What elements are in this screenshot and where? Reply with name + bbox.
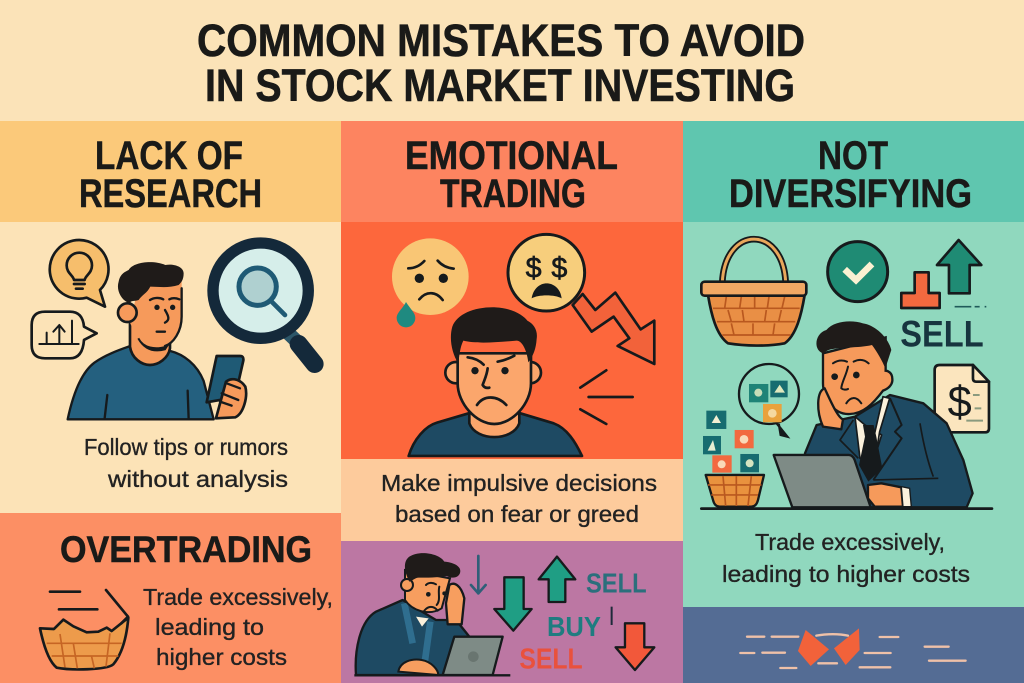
arrow: green up	[937, 240, 981, 293]
label: sell: SELL	[586, 568, 647, 599]
caption: trade excessively: leading to higher costs	[722, 561, 970, 587]
icon: check badge	[828, 242, 888, 302]
heading: emotional trading: EMOTIONAL	[405, 134, 618, 178]
panel: buy and sell confusion	[341, 541, 683, 683]
caption: trade excessively: higher costs	[156, 644, 287, 670]
arrow: green down	[494, 577, 532, 631]
icon: sad face with tear	[392, 238, 469, 327]
icon: chart bubble	[32, 312, 97, 358]
icon: large basket	[701, 239, 806, 346]
dashed streaks	[740, 634, 966, 668]
icon: dollar document	[935, 365, 989, 432]
icon: dollar-eye face: $	[551, 252, 567, 284]
heading: not diversifying: NOT	[818, 134, 888, 178]
caption: trade excessively: Trade excessively,	[755, 529, 945, 555]
label: sell red: SELL	[519, 643, 583, 675]
illustration: worried investor	[701, 239, 992, 509]
icon: red flags	[798, 628, 860, 666]
panel: lack of research	[0, 121, 341, 513]
icon: stress marks	[580, 370, 633, 424]
title banner	[0, 0, 1024, 121]
heading: overtrading: OVERTRADING	[60, 529, 312, 570]
heading: not diversifying: DIVERSIFYING	[729, 172, 972, 216]
heading: not diversifying	[729, 134, 972, 216]
heading: lack of research: LACK OF	[95, 134, 243, 178]
caption: follow tips: Follow tips or rumors	[84, 434, 288, 460]
icon: broken basket	[40, 590, 128, 669]
icon: dollar-eye face: $	[526, 252, 542, 284]
illustration: person checking phone	[32, 240, 315, 419]
heading: emotional trading	[405, 134, 618, 216]
caption: impulsive decisions	[381, 470, 657, 527]
icon: red step block	[901, 272, 940, 308]
caption: trade excessively: leading to	[155, 614, 264, 640]
icon: light bulb bubble	[50, 240, 109, 307]
label: buy: BUY	[547, 611, 601, 642]
heading: emotional trading: TRADING	[440, 172, 586, 216]
icon: diversification bubble	[739, 364, 799, 437]
heading: lack of research	[79, 134, 262, 216]
panel: emotional trading	[341, 121, 683, 541]
caption: trade excessively: Trade excessively,	[143, 584, 333, 610]
person	[68, 262, 246, 419]
title banner: IN STOCK MARKET INVESTING	[205, 60, 795, 111]
icon: dollar document: $	[948, 379, 972, 427]
caption: impulsive decisions: based on fear or greed	[395, 501, 639, 527]
magnifying glass	[213, 243, 315, 364]
panel: not diversifying	[683, 121, 1024, 607]
caption: follow tips: without analysis	[107, 466, 288, 492]
panel: overtrading	[0, 513, 341, 683]
caption: follow tips	[84, 434, 288, 492]
caption: trade excessively	[722, 529, 970, 587]
caption: impulsive decisions: Make impulsive decisions	[381, 470, 657, 496]
person: investor with laptop	[701, 321, 992, 509]
panel: partial bottom strip with flags	[683, 607, 1024, 683]
icon: falling chart arrow	[573, 293, 654, 364]
icon: dollar-eye face	[508, 234, 585, 311]
caption: trade excessively	[143, 584, 333, 670]
label: sell: SELL	[900, 314, 984, 355]
person: stressed trader at laptop	[354, 553, 510, 675]
icon: assets in small basket	[703, 411, 764, 507]
title banner: COMMON MISTAKES TO AVOID	[197, 15, 805, 66]
person: frowning trader	[409, 307, 582, 456]
arrow: red down	[616, 623, 654, 670]
heading: lack of research: RESEARCH	[79, 172, 262, 216]
illustration: upset trader	[392, 234, 654, 456]
arrow: thin down	[471, 556, 486, 593]
arrow: green up	[539, 557, 575, 602]
